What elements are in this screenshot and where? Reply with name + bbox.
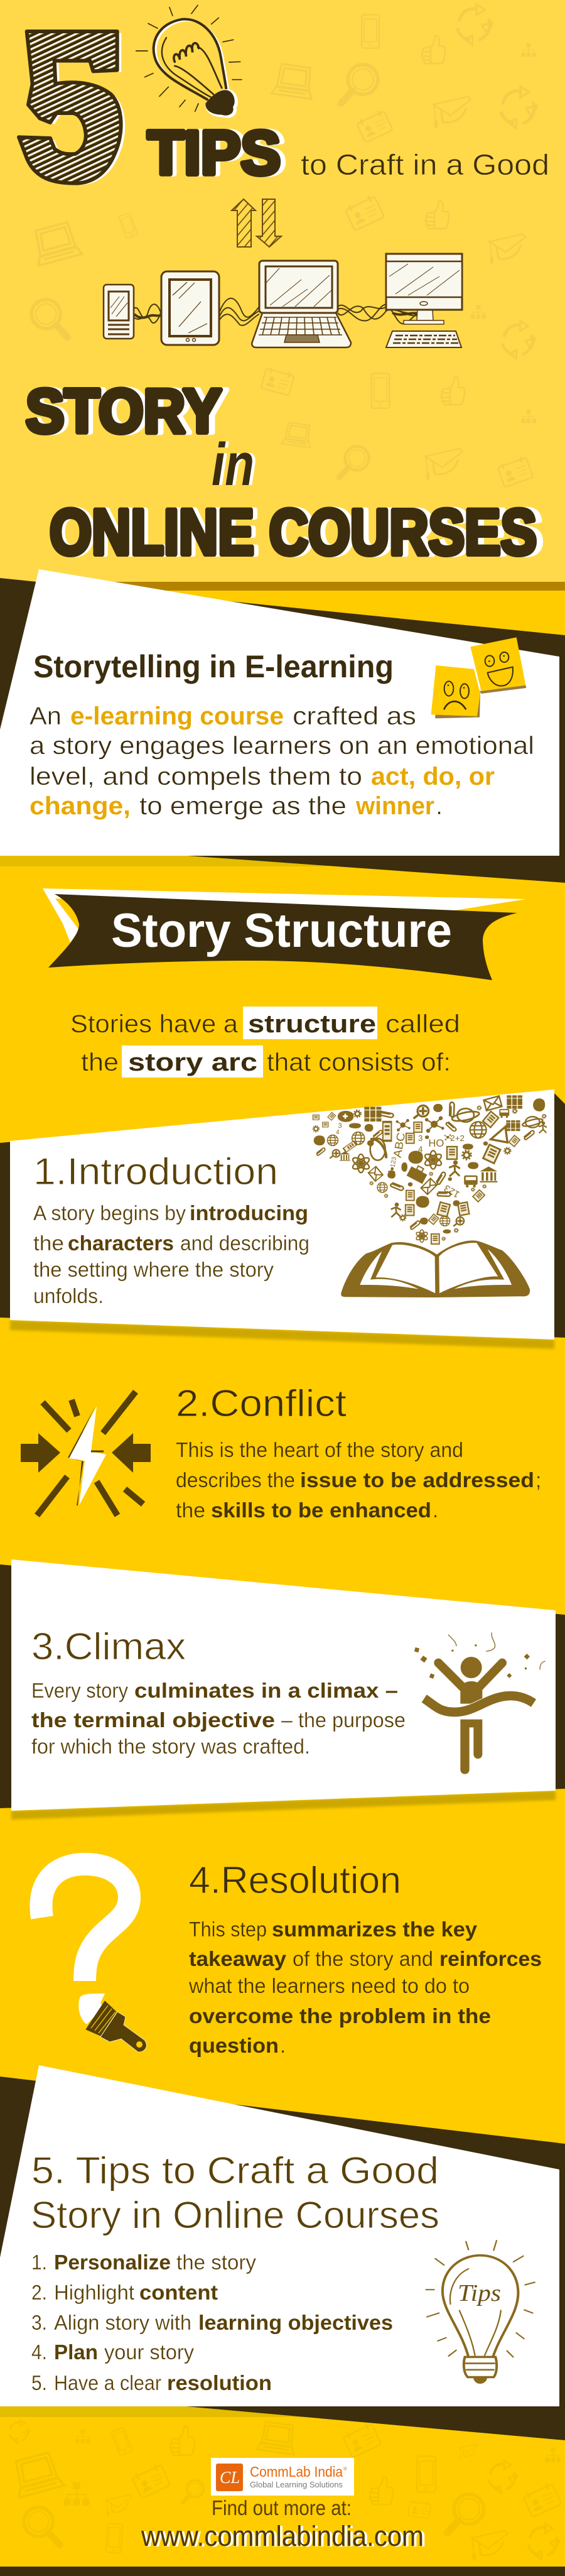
cloud labels: [336, 1122, 465, 1200]
body: resolution: overcome the problem in the: [189, 2004, 491, 2028]
body: climax: for which the story was crafted.: [31, 1735, 310, 1758]
body: introduction: the setting where the story: [33, 1258, 274, 1281]
title: TIPS: TIPS: [151, 118, 286, 187]
icon: tips light bulb: [426, 2240, 535, 2384]
text: stories have a structure called the story arc: Stories have a: [70, 1010, 239, 1038]
body: climax: the terminal objective: [31, 1708, 275, 1732]
body: resolution: of the story and: [293, 1947, 433, 1970]
footer: dark bottom strip: [0, 2567, 565, 2576]
list of five tips: Plan: [54, 2340, 98, 2364]
intro paragraph: a story engages learners on an emotional: [30, 732, 534, 760]
panel: 3 climax: [0, 1559, 565, 1820]
body: conflict: issue to be addressed: [300, 1468, 534, 1492]
body: conflict: This is the heart of the story and: [176, 1438, 463, 1461]
heading: 3.Climax: 3.Climax: [31, 1625, 186, 1667]
faint background icon pattern: title area: [30, 4, 537, 488]
body: conflict: skills to be enhanced: [211, 1498, 431, 1522]
logo: commlab india: CommLab India: [250, 2464, 343, 2480]
list of five tips: 5.: [31, 2371, 47, 2394]
title: STORY: STORY: [30, 376, 228, 445]
body: conflict: the: [176, 1498, 205, 1522]
text: find out more at: Find out more at:: [212, 2496, 352, 2519]
list of five tips: resolution: [167, 2371, 272, 2394]
logo: commlab india: ®: [343, 2466, 347, 2472]
title: in: in: [212, 431, 254, 498]
wires between devices: [134, 298, 421, 325]
body: resolution: This step: [189, 1918, 267, 1941]
list of five tips: Personalize: [54, 2251, 171, 2274]
body: introduction: and describing: [180, 1231, 309, 1255]
body: introduction: introducing: [190, 1201, 308, 1225]
panel: 2 conflict: [21, 1382, 541, 1522]
icon: clashing arrows and lightning bolt: [21, 1392, 151, 1515]
list of five tips: the story: [176, 2251, 256, 2274]
body: resolution: takeaway: [189, 1947, 287, 1970]
body: climax: Every story: [31, 1679, 128, 1702]
body: resolution: .: [280, 2034, 286, 2057]
icon: up and down exchange arrows: [232, 199, 281, 247]
body: climax: – the purpose: [281, 1708, 406, 1732]
cloud labels: 123: [389, 1156, 398, 1168]
intro paragraph: e-learning course: [70, 702, 284, 730]
laptop: [252, 261, 351, 347]
list of five tips: Highlight: [54, 2281, 134, 2304]
list of five tips: 2.: [31, 2281, 47, 2304]
intro paragraph: winner: [355, 792, 434, 820]
logo: commlab india: CL: [220, 2468, 240, 2487]
heading: 1.Introduction: 1.Introduction: [33, 1150, 278, 1192]
body: introduction: the: [33, 1231, 64, 1255]
icon: hand-drawn numeral 5: [19, 31, 125, 185]
cloud labels: HO: [428, 1137, 444, 1149]
body: resolution: what the learners need to do to: [188, 1974, 470, 1997]
icon: sticky notes with sad and happy faces: [431, 637, 526, 718]
text: stories have a structure called the story arc: called: [385, 1010, 460, 1038]
lettering: Tips: Tips: [458, 2280, 501, 2306]
cloud labels: 4: [418, 1144, 423, 1154]
illustration: connected devices: [104, 254, 462, 347]
cloud labels: 4: [336, 1129, 340, 1136]
cloud labels: 3: [338, 1122, 342, 1130]
icon: runner crossing finish ribbon: [414, 1632, 546, 1774]
icon: light bulb with rays: [136, 5, 242, 116]
link: www.commlabindia.com: www.commlabindia.com: [141, 2520, 424, 2552]
list of five tips: 3.: [31, 2311, 47, 2334]
heading: storytelling in e-learning: Storytelling in E-learning: [33, 649, 394, 684]
heading: tips to craft: 5. Tips to Craft a Good: [31, 2149, 439, 2191]
heading: tips to craft: Story in Online Courses: [31, 2194, 439, 2236]
list of five tips: your story: [104, 2340, 194, 2364]
phone: [104, 285, 134, 339]
body: resolution: reinforces: [439, 1947, 542, 1970]
body: conflict: [176, 1438, 541, 1522]
list of five tips: 4.: [31, 2340, 47, 2364]
banner heading text: Story Structure: [111, 904, 452, 958]
flying symbols: [313, 1095, 547, 1244]
list of five tips: content: [139, 2281, 218, 2304]
icon: painted question mark with brush: [41, 1864, 146, 2052]
background: cream yellow title area: [0, 0, 565, 582]
text: stories have a structure called the story arc: that consists of:: [267, 1049, 451, 1076]
intro paragraph: .: [436, 792, 443, 820]
faint background icon pattern: footer: [9, 2420, 561, 2561]
list of five tips: 1.: [31, 2251, 47, 2274]
list of five tips: Align story with: [54, 2311, 191, 2334]
intro paragraph: act, do, or: [371, 763, 495, 790]
desktop monitor and keyboard: [386, 254, 462, 347]
cloud labels: 2+2: [450, 1133, 465, 1143]
heading: 4.Resolution: 4.Resolution: [189, 1859, 401, 1901]
title: STORY: STORY: [26, 376, 222, 445]
icon: open book with flying learning symbols: [313, 1095, 547, 1297]
book: [341, 1240, 530, 1297]
intro paragraph: change,: [30, 792, 131, 820]
body: introduction: unfolds.: [33, 1284, 104, 1307]
list of five tips: [31, 2251, 393, 2394]
body: introduction: characters: [68, 1231, 174, 1255]
panel: 1 introduction: [0, 1089, 565, 1349]
banner: story structure: [43, 888, 526, 980]
title: to Craft in a Good: to Craft in a Good: [301, 148, 549, 181]
intro paragraph: to emerge as the: [139, 792, 347, 820]
text: stories have a structure called the story arc: structure: [248, 1010, 376, 1038]
cloud labels: 3: [418, 1133, 422, 1143]
panel: 4 resolution: [41, 1859, 542, 2057]
intro paragraph: [30, 702, 534, 820]
panel: 5 tips to craft a good story: [0, 2065, 565, 2440]
text: stories have a structure called the story arc: the: [81, 1049, 119, 1076]
list of five tips: learning objectives: [198, 2311, 393, 2334]
list of five tips: Have a clear: [54, 2371, 161, 2394]
intro paragraph: crafted as: [293, 702, 416, 730]
link: www.commlabindia.com: www.commlabindia.com: [143, 2521, 426, 2553]
body: climax: [31, 1679, 406, 1758]
logo: commlab india: [211, 2458, 354, 2496]
body: conflict: .: [433, 1498, 438, 1522]
text: stories have a structure called the story arc: story arc: [128, 1049, 257, 1076]
title: TIPS: TIPS: [148, 118, 281, 187]
body: climax: culminates in a climax –: [134, 1679, 398, 1702]
intro paragraph: level, and compels them to: [30, 763, 362, 790]
cloud labels: 123: [443, 1182, 461, 1200]
body: resolution: summarizes the key: [272, 1918, 478, 1941]
intro paragraph: An: [30, 702, 62, 730]
tablet: [161, 271, 219, 345]
logo: commlab india: Global Learning Solutions: [250, 2480, 343, 2489]
body: resolution: [188, 1918, 542, 2057]
body: introduction: [33, 1201, 309, 1307]
body: conflict: describes the: [176, 1468, 295, 1492]
title: in: in: [215, 431, 257, 498]
panel: storytelling in e-learning: [0, 569, 565, 883]
background: main yellow: [0, 591, 565, 2576]
text: stories have a structure called the story arc: [70, 1007, 460, 1078]
heading: tips to craft: [31, 2149, 439, 2236]
background: dark gold divider band: [0, 582, 565, 591]
body: resolution: question: [189, 2034, 279, 2057]
body: introduction: A story begins by: [33, 1201, 186, 1225]
cloud labels: ABC: [391, 1132, 407, 1159]
body: conflict: ;: [535, 1468, 541, 1492]
heading: 2.Conflict: 2.Conflict: [176, 1382, 347, 1424]
